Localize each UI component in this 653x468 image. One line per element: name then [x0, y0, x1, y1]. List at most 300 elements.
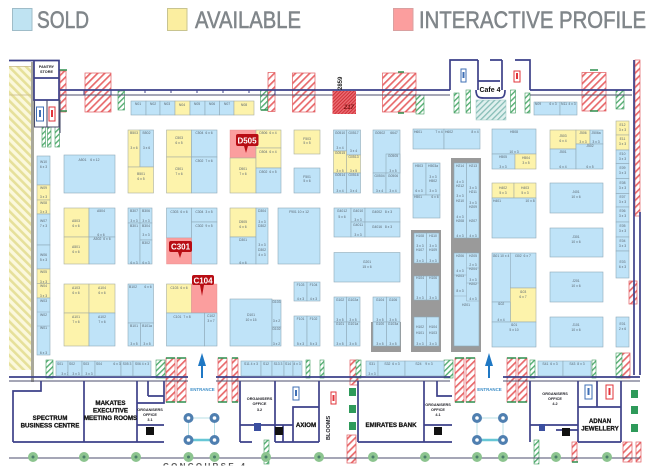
booths: east column	[616, 121, 629, 347]
booths: zone B: B503	[130, 131, 138, 135]
booths: zone H: 6 x 3	[415, 189, 423, 193]
booths: west column: W02	[40, 313, 47, 317]
booths: corridor row right: S24 9 x 3	[415, 362, 433, 366]
room labels: SPECTRUM	[33, 415, 67, 422]
booths: zone D: 7 x 6	[239, 172, 247, 176]
booths: zone A: A103	[72, 286, 80, 290]
booths: zone G: G106	[389, 298, 397, 302]
legend: available: AVAILABLE	[195, 7, 301, 34]
booths: zone D: D301	[239, 238, 247, 242]
booths: west column	[37, 156, 50, 355]
room labels: OFFICE	[431, 408, 445, 412]
room labels: MEETING ROOMS	[84, 415, 137, 422]
booths: zone H: H602	[445, 130, 453, 134]
booths: west column: 3 x 3	[40, 195, 47, 199]
booths: zone F: F901 10 x 12	[289, 210, 309, 214]
booths: zone A: A102	[98, 315, 106, 319]
booths: corridor row left: S14	[285, 362, 291, 366]
booths: zone C: C502 7 x 6	[195, 159, 213, 163]
booths: zone I: I101	[511, 323, 517, 327]
booths: corridor row right: S43 8 x 3	[569, 362, 585, 366]
booths: zone G: 3 x 3	[354, 218, 362, 222]
booths: zone G: 3 x 5	[376, 318, 384, 322]
booths: zone B: B301	[130, 224, 138, 228]
booths: zone B: 3 x 3	[142, 219, 150, 223]
booths: zone H: H207	[469, 219, 477, 223]
booths: N row: 6 x 3	[549, 102, 557, 106]
booths: zone H	[411, 129, 536, 352]
booths: zone G: G101	[336, 322, 344, 326]
booths: west column: 6 x 3	[40, 351, 47, 355]
booths: zone B: B306	[142, 209, 150, 213]
booths: zone I: I301 10 x 4	[493, 254, 510, 258]
booths: zone H: H212	[456, 184, 464, 188]
booths: zone F: F104	[310, 283, 317, 287]
booths: zone I: I103	[520, 290, 526, 294]
booths: west column: 7 x 3	[40, 224, 47, 228]
booths: west column: W05	[40, 270, 47, 274]
booths: zone H: 6 x 6	[431, 195, 439, 199]
booths: zone H: H205	[469, 254, 477, 258]
booths: zone A: A504	[97, 209, 105, 213]
booths: zone A: 6 x 6	[98, 291, 106, 295]
booths: zone H: 8 x 4	[471, 130, 479, 134]
interactive pin: C301	[169, 241, 192, 258]
booths: zone H: 3 x 3	[469, 186, 477, 190]
booths: zone B: 6 x 3	[130, 261, 138, 265]
label: pantry store	[39, 65, 55, 74]
booths: zone C: C302 9 x 5	[195, 224, 213, 228]
booths: zone J: 10 x 6	[571, 240, 581, 244]
booths: N row	[131, 101, 577, 115]
booths: corridor row right: 3 x 3	[368, 372, 376, 376]
booths: east column: 3 x 3	[619, 244, 626, 248]
booths: zone D: D501	[239, 167, 247, 171]
booths: zone B: 3 x 6	[143, 146, 150, 150]
room labels: ADNAN	[589, 418, 612, 425]
booths: west column: W09	[40, 186, 47, 190]
booths: east column: E09	[619, 166, 626, 170]
booths: N row: N02	[150, 102, 156, 106]
booths: zone F: 5 x 6	[303, 179, 311, 183]
room labels: EXECUTIVE	[93, 408, 128, 414]
green hatched service zones	[42, 70, 624, 464]
booths: zone J: J501	[559, 150, 567, 154]
legend: sold: SOLD	[37, 7, 89, 34]
booths: corridor row left: S05 3	[123, 362, 132, 366]
booths: zone G: G4016 8 x 3	[372, 225, 392, 229]
booths: zone G	[334, 130, 401, 352]
booths: zone D: D504 6 x 4	[259, 150, 277, 154]
booths: zone C: C304 3 x 5	[195, 210, 213, 214]
booths: zone G: G0504	[374, 174, 385, 178]
booths: east column: E01	[619, 322, 626, 326]
booths: zone J: J503	[559, 134, 567, 138]
marked stand 217: 217	[343, 105, 355, 111]
booths: zone H: H106	[429, 276, 437, 280]
booths: zone D: D304	[258, 209, 266, 213]
booths: zone C: 3 x 7	[207, 319, 215, 323]
booths: zone G: 3 x 3	[354, 233, 362, 237]
booths: corridor row right: S32 6 x 3	[384, 362, 400, 366]
room labels: BUSINESS CENTRE	[21, 422, 79, 430]
room labels: ORGANISERS	[542, 392, 568, 396]
booths: zone I: I302 6 x 7	[515, 254, 531, 258]
booths: zone A: A503	[72, 219, 80, 223]
booths: east column: E03	[619, 260, 626, 264]
booths: zone H: 4 x 3	[456, 215, 464, 219]
booths: corridor row left: S12	[263, 362, 269, 366]
booths: corridor row left: 3 x 3	[61, 372, 69, 376]
booths: zone G: 3 x 5	[389, 318, 397, 322]
booths: zone B: B102	[129, 285, 137, 289]
room labels: EMIRATES BANK	[365, 422, 417, 429]
booths: corridor row left: 4 x 3	[293, 362, 301, 366]
booths: east column: 3 x 3	[619, 157, 626, 161]
booths: zone D: D103	[272, 300, 281, 304]
booths: zone H: H503a	[428, 164, 438, 168]
booths: zone B	[128, 130, 154, 346]
booths: west column: 3 x 3	[40, 210, 47, 214]
room labels	[21, 392, 620, 440]
booths: east column: 3 x 3	[619, 200, 626, 204]
booths: N row: N07	[224, 102, 230, 106]
booths: zone B: B302	[142, 241, 150, 245]
booths: zone B: B101a	[142, 324, 152, 328]
room labels: OFFICE	[548, 397, 562, 401]
booths: east column: 2 x 6	[619, 327, 626, 331]
room labels: 4.1	[435, 413, 441, 417]
booths: zone H: H101	[416, 331, 424, 335]
booths: zone G: 15 x 6	[362, 265, 372, 269]
booths: west column: W01	[40, 326, 47, 330]
booths: corridor row left	[56, 361, 302, 376]
booths: zone G: 3 x 5	[336, 342, 344, 346]
booths: zone G: G4002 8 x 3	[372, 210, 392, 214]
booths: zone H: H502	[429, 179, 437, 183]
booths: zone H: H209	[469, 205, 477, 209]
interactive pin: C104	[192, 275, 214, 296]
booths: zone H: 3 x 3	[416, 342, 424, 346]
booths: zone H: 4 x 3	[456, 269, 464, 273]
booths: zone A: A501 6 x 12	[79, 158, 100, 162]
room labels: 4.2	[552, 402, 558, 406]
booths: zone F: F102	[310, 317, 317, 321]
booths: zone J: 6 x 5	[586, 165, 594, 169]
booths: zone G: G0515	[335, 151, 345, 155]
booths: zone C: C504 6 x 6	[195, 131, 213, 135]
room labels: MAKATES	[95, 400, 126, 407]
booths: zone A: A501	[72, 245, 80, 249]
booths: zone F: 5 x 5	[303, 141, 311, 145]
booths: zone B: 6 x 6	[144, 285, 152, 289]
booths: west column: W08	[40, 201, 47, 205]
booths: zone F	[278, 130, 320, 346]
interactive pin: D505	[236, 134, 258, 153]
booths: zone G: G100	[376, 322, 384, 326]
booths: zone H: H211	[469, 190, 477, 194]
interactive pin: D505: D505	[237, 136, 257, 146]
booths: zone G: 3 x 5	[350, 169, 357, 173]
booths: zone H: H104	[429, 325, 437, 329]
interactive pin: C301: C301	[171, 242, 191, 252]
booths: zone H: 3 x 5	[522, 161, 530, 165]
booths: zone I	[492, 253, 536, 347]
booths: west column: W07	[40, 219, 47, 223]
room labels: OFFICE	[253, 402, 267, 406]
label: pantry store: STORE	[40, 70, 53, 74]
booths: zone H: 3 x 3	[429, 296, 437, 300]
booths: corridor row left: S03	[83, 362, 89, 366]
booths: zone G: G0514	[335, 173, 345, 177]
booths: N row: N05	[194, 102, 200, 106]
booths: zone D: 10 x 15	[245, 318, 257, 322]
booths: zone G: G0516	[348, 173, 359, 177]
booths: zone H: H403	[521, 186, 529, 190]
booths: zone I: 5 x 10	[509, 328, 519, 332]
booths: zone B: 3 x 6	[130, 146, 138, 150]
room labels: OFFICE	[143, 413, 157, 417]
booths: zone H: 4 x 3	[469, 297, 477, 301]
booths: east column: 3 x 3	[619, 128, 626, 132]
booths: zone G: 3 x 5	[349, 342, 357, 346]
booths: zone H: 3 x 3	[429, 189, 437, 193]
booths: zone B: 3 x 5	[143, 342, 151, 346]
booths: zone D: 4 x 3	[258, 253, 266, 257]
booths: zone H: 3 x 3	[469, 201, 477, 205]
booths: N row: N11	[561, 102, 567, 106]
booths: zone C	[166, 130, 217, 346]
booths: zone G: 3 x 5	[376, 342, 384, 346]
entrance arrow: right	[477, 353, 502, 392]
booths: N row: N06	[209, 102, 215, 106]
booths: zone J: 6 x 4	[559, 165, 567, 169]
booths: zone G: 3 x 5	[336, 318, 344, 322]
booths: zone H: H401	[493, 199, 501, 203]
booths: zone J: J301	[572, 235, 580, 239]
booths: zone D: 3 x 3	[258, 243, 266, 247]
booths: zone G: G0513	[348, 155, 359, 159]
booths: zone G: 3 x 5	[389, 169, 397, 173]
red hatched service zones	[60, 60, 641, 463]
booths: corridor row right	[366, 361, 591, 376]
booths: corridor row left: 6 x 3	[113, 362, 121, 366]
booths: zone F: 4 x 3	[310, 297, 317, 301]
booths: zone D: D505	[239, 220, 247, 224]
booths: east column: 3 x 3	[619, 186, 626, 190]
booths: zone J: 3 x 3	[592, 140, 600, 144]
booths: zone G: 5 x 6	[338, 215, 346, 219]
booths: zone C: 6 x 5	[175, 141, 183, 145]
booths: zone H: 3 x 3	[456, 194, 464, 198]
booths: east column: E06	[619, 209, 626, 213]
booths: N row: N09	[535, 102, 541, 106]
booths: zone H: 3 x 3	[416, 244, 424, 248]
booths: zone B: B307	[130, 209, 138, 213]
room labels: BLOOMS	[326, 416, 332, 440]
booths: west column: W04	[40, 284, 47, 288]
booths: west column: 3 x 3	[40, 294, 47, 298]
booths: zone D: 3 x 2	[273, 342, 280, 346]
booths: zone H: 4 x 3	[456, 234, 464, 238]
booths: corridor row left: S06 4 x 3	[135, 362, 149, 366]
booths: zone H: H214	[456, 164, 464, 168]
booths: zone G: G0517	[348, 131, 359, 135]
booths: zone G: G4010	[353, 209, 363, 213]
room labels: AXIOM	[296, 422, 316, 429]
booths: zone H: 3 x 3	[429, 342, 437, 346]
booths: zone D: D101	[247, 313, 255, 317]
booths: zone H: H508	[510, 130, 518, 134]
booths: zone G: G0505	[388, 154, 398, 158]
booths: zone H: H102	[416, 325, 424, 329]
booths: west column: W10	[40, 160, 47, 164]
booths: zone F: 5 x 3	[297, 342, 304, 346]
booths: zone G: G4011	[353, 223, 363, 227]
booths: zone A: 7 x 6	[98, 320, 106, 324]
booths: zone D: 6 x 6	[239, 261, 247, 265]
legend: available	[168, 7, 301, 34]
booths: zone B: B502	[143, 131, 151, 135]
booths: zone G: G0510	[335, 131, 345, 135]
booths: zone D: 3 x 2	[273, 319, 280, 323]
booths: zone B: B101	[130, 324, 138, 328]
booths: zone G: G102a	[348, 298, 358, 302]
booths: zone D: 3 x 3	[258, 220, 266, 224]
booths: zone D: D302	[258, 224, 266, 228]
booths: zone G: 3 x 4	[336, 189, 344, 193]
booths: N row: N08	[241, 103, 247, 107]
booths: zone H: 3 x 3	[416, 296, 424, 300]
booths: zone G: 6647	[390, 131, 398, 135]
booths: N row: N03	[164, 102, 170, 106]
booths: corridor row right: S31	[369, 362, 375, 366]
booths: zone F: F501	[303, 175, 311, 179]
booths: zone H: 4 x 3	[469, 234, 477, 238]
marked stand 217: 2859	[338, 76, 344, 90]
room labels: ORGANISERS	[247, 397, 273, 401]
booths: zone A: 6 x 6	[72, 291, 80, 295]
booths: corridor row left: S01	[57, 362, 63, 366]
booths: zone I: 4 x 4	[497, 318, 505, 322]
booths: corridor row left: 3 x 3	[85, 372, 93, 376]
entrance arrow: right: ENTRANCE	[477, 387, 502, 392]
booths: zone G: 3 x 4	[389, 189, 397, 193]
booths: zone H: H505	[499, 155, 507, 159]
booths: zone D: D102	[272, 327, 281, 331]
room details: lifts, washrooms, stair boxes	[36, 69, 638, 436]
booths: zone G: 3 x 4	[350, 189, 357, 193]
booths: zone F: F101	[297, 317, 304, 321]
booths: zone A: A101	[72, 315, 80, 319]
booths: zone H: H402	[499, 186, 507, 190]
booths: zone H: 10 x 8	[525, 199, 535, 203]
booths: zone H: H103	[429, 331, 437, 335]
booths: zone H: H601	[414, 130, 422, 134]
booths: zone G: 3 x 5	[349, 318, 357, 322]
booths: east column: 3 x 3	[619, 171, 626, 175]
booths: zone G: 3 x 4	[376, 189, 383, 193]
booths: zone A: 6 x 6	[97, 233, 105, 237]
room labels: ORGANISERS	[425, 403, 451, 407]
booths: zone J: J506	[579, 131, 587, 135]
booths: zone H: 10 x 3	[509, 150, 519, 154]
booths: zone H: 3 x 3	[429, 259, 437, 263]
booths: east column: E11	[620, 137, 626, 141]
booths: zone B: 3 x 5	[130, 342, 138, 346]
booths: zone C: C501	[175, 167, 183, 171]
booths: zone G: G103a	[388, 322, 398, 326]
booths: zone J: J101	[572, 323, 580, 327]
booths: east column: E08	[619, 181, 626, 185]
room labels: JEWELLERY	[581, 426, 620, 432]
booths: zone G: G0506	[388, 174, 398, 178]
interactive pin: C104: C104	[193, 276, 213, 286]
booths: zone J: 3 x 3	[579, 140, 587, 144]
booths: zone B: B304	[142, 224, 150, 228]
booths: zone D: D502 6 x 5	[259, 170, 277, 174]
booths: east column: E12	[619, 123, 626, 127]
booths: east column: E04	[619, 239, 626, 243]
booths: zone H: H504	[522, 156, 530, 160]
booths: zone H: H107	[416, 248, 424, 252]
booths: zone A: 6 x 6	[72, 250, 80, 254]
booths: zone C: C102	[207, 314, 215, 318]
booths: zone F: 5 x 3	[310, 342, 317, 346]
atrium columns	[184, 413, 508, 445]
booths: zone C: C503	[175, 136, 183, 140]
booths: east column: E05	[619, 224, 626, 228]
booths: east column: 6 x 3	[619, 265, 626, 269]
booths: zone H: H210	[456, 199, 464, 203]
booths: zone D: 6 x 6	[239, 225, 247, 229]
booths: N row: N04	[179, 103, 185, 107]
booths: zone C: C303 6 x 6	[170, 210, 188, 214]
booths: zone H: H202	[469, 282, 477, 286]
booths: corridor row left: S13 3	[274, 362, 283, 366]
booths: zone G: G101a	[348, 322, 358, 326]
room labels: ORGANISERS	[137, 408, 163, 412]
booths: corridor row left: S02	[69, 362, 75, 366]
booths: zone H: 3 x 3	[469, 278, 477, 282]
booths: zone H: H108	[416, 234, 424, 238]
booths: zone J: J502	[586, 144, 594, 148]
room labels: 3.1	[147, 418, 153, 422]
booths: zone G: G104	[376, 298, 384, 302]
booths: zone C: C103 6 x 6	[170, 286, 188, 290]
booths: zone B: B501	[137, 172, 145, 176]
booths: zone H: 3 x 3	[429, 175, 437, 179]
booths: corridor row right: S41 6 x 3	[542, 362, 558, 366]
booths: corridor row left: S11 4 x 3	[244, 362, 258, 366]
booths: zone H: 3 x 3	[429, 244, 437, 248]
booths: west column: W06	[40, 253, 47, 257]
booths: zone J: J401	[572, 190, 580, 194]
booths: zone J: 10 x 6	[571, 328, 581, 332]
booths: zone H: 2 x 3	[469, 263, 477, 267]
booths: zone G: 3 x 4	[336, 146, 344, 150]
booths: zone J: 10 x 6	[571, 195, 581, 199]
booths: zone G: 3 x 5	[389, 342, 397, 346]
booths: zone H: H503	[415, 164, 423, 168]
booths: zone H: 7 x 4	[435, 130, 443, 134]
booths: east column: 3 x 3	[619, 214, 626, 218]
booths: east column: 3 x 3	[619, 229, 626, 233]
booths: zone I: 6 x 7	[519, 295, 527, 299]
booths: zone A: 7 x 6	[72, 320, 80, 324]
booths: zone H: H110	[429, 234, 437, 238]
booths: zone H: H109	[429, 248, 437, 252]
